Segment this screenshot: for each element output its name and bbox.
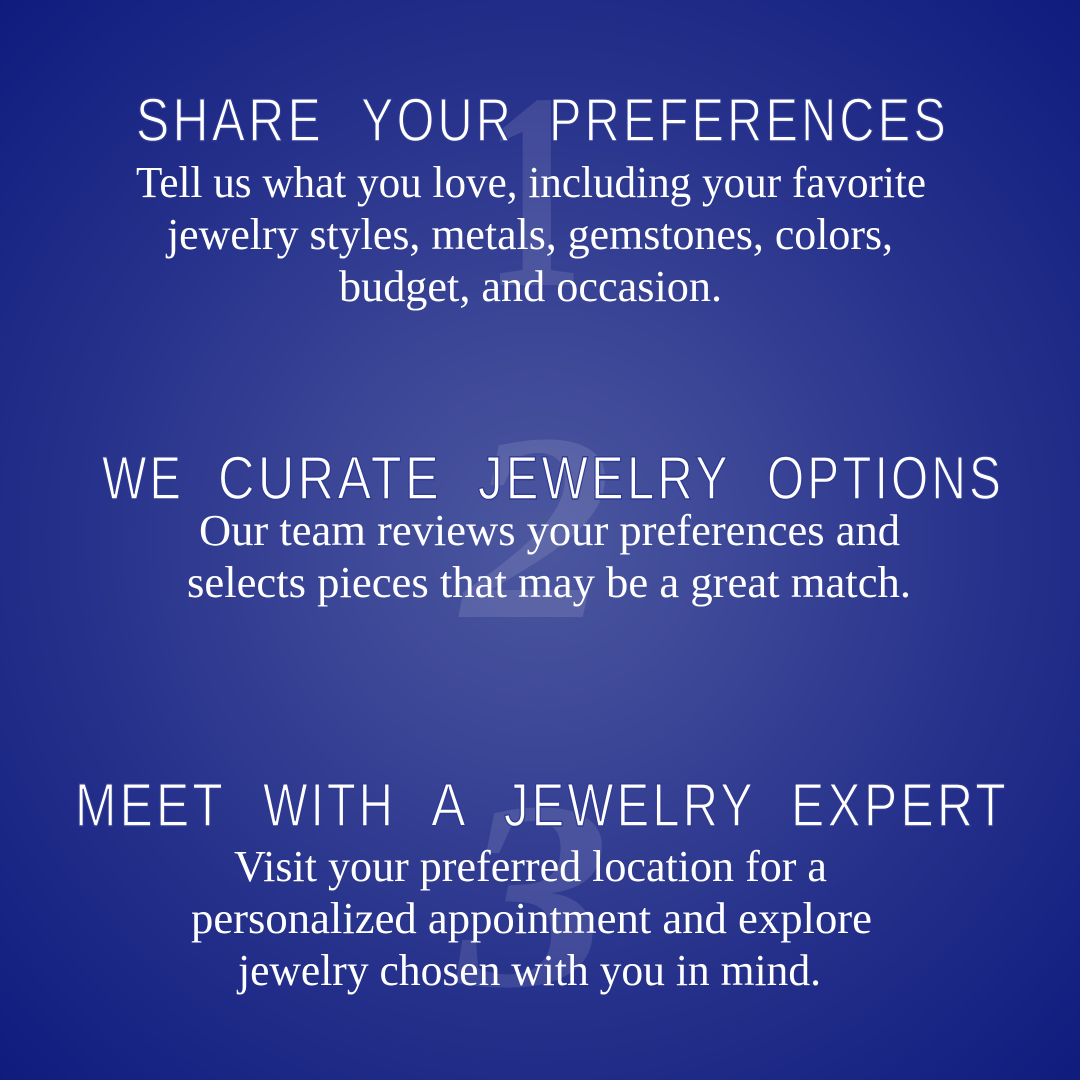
body text: step 1 [136, 158, 926, 311]
body text: step 3: jewelry chosen with you in mind. [236, 946, 821, 995]
body text: step 1: Tell us what you love, including your favorite [136, 158, 926, 207]
heading: we curate jewelry options: WE [102, 444, 184, 512]
heading: meet with a jewelry expert: EXPERT [791, 771, 1009, 839]
body text: step 1: budget, and occasion. [339, 262, 722, 311]
heading: share your preferences: PREFERENCES [549, 86, 949, 154]
step 2 [102, 378, 1004, 675]
heading: meet with a jewelry expert: A [431, 771, 469, 839]
body text: step 3 [191, 842, 872, 995]
body text: step 2: Our team reviews your preferences and [199, 506, 900, 555]
numeral 2: 2 [457, 378, 612, 675]
heading: we curate jewelry options: JEWELRY [478, 444, 731, 512]
heading: we curate jewelry options [102, 444, 1004, 512]
heading: share your preferences: SHARE [136, 86, 324, 154]
body text: step 1: jewelry styles, metals, gemstones, colors, [165, 210, 893, 259]
heading: we curate jewelry options: OPTIONS [767, 444, 1004, 512]
step 3 [75, 746, 1009, 1043]
body text: step 2: selects pieces that may be a great match. [187, 558, 911, 607]
heading: share your preferences [136, 86, 949, 154]
numeral 3: 3 [453, 746, 610, 1043]
heading: meet with a jewelry expert: WITH [263, 771, 396, 839]
heading: share your preferences: YOUR [361, 86, 514, 154]
heading: we curate jewelry options: CURATE [218, 444, 442, 512]
heading: meet with a jewelry expert [75, 771, 1009, 839]
heading: meet with a jewelry expert: JEWELRY [504, 771, 756, 839]
numeral 1: 1 [484, 35, 584, 346]
heading: meet with a jewelry expert: MEET [75, 771, 226, 839]
body text: step 3: Visit your preferred location for a [234, 842, 827, 891]
body text: step 3: personalized appointment and explore [191, 894, 872, 943]
body text: step 2 [187, 506, 911, 607]
step 1 [136, 35, 949, 346]
